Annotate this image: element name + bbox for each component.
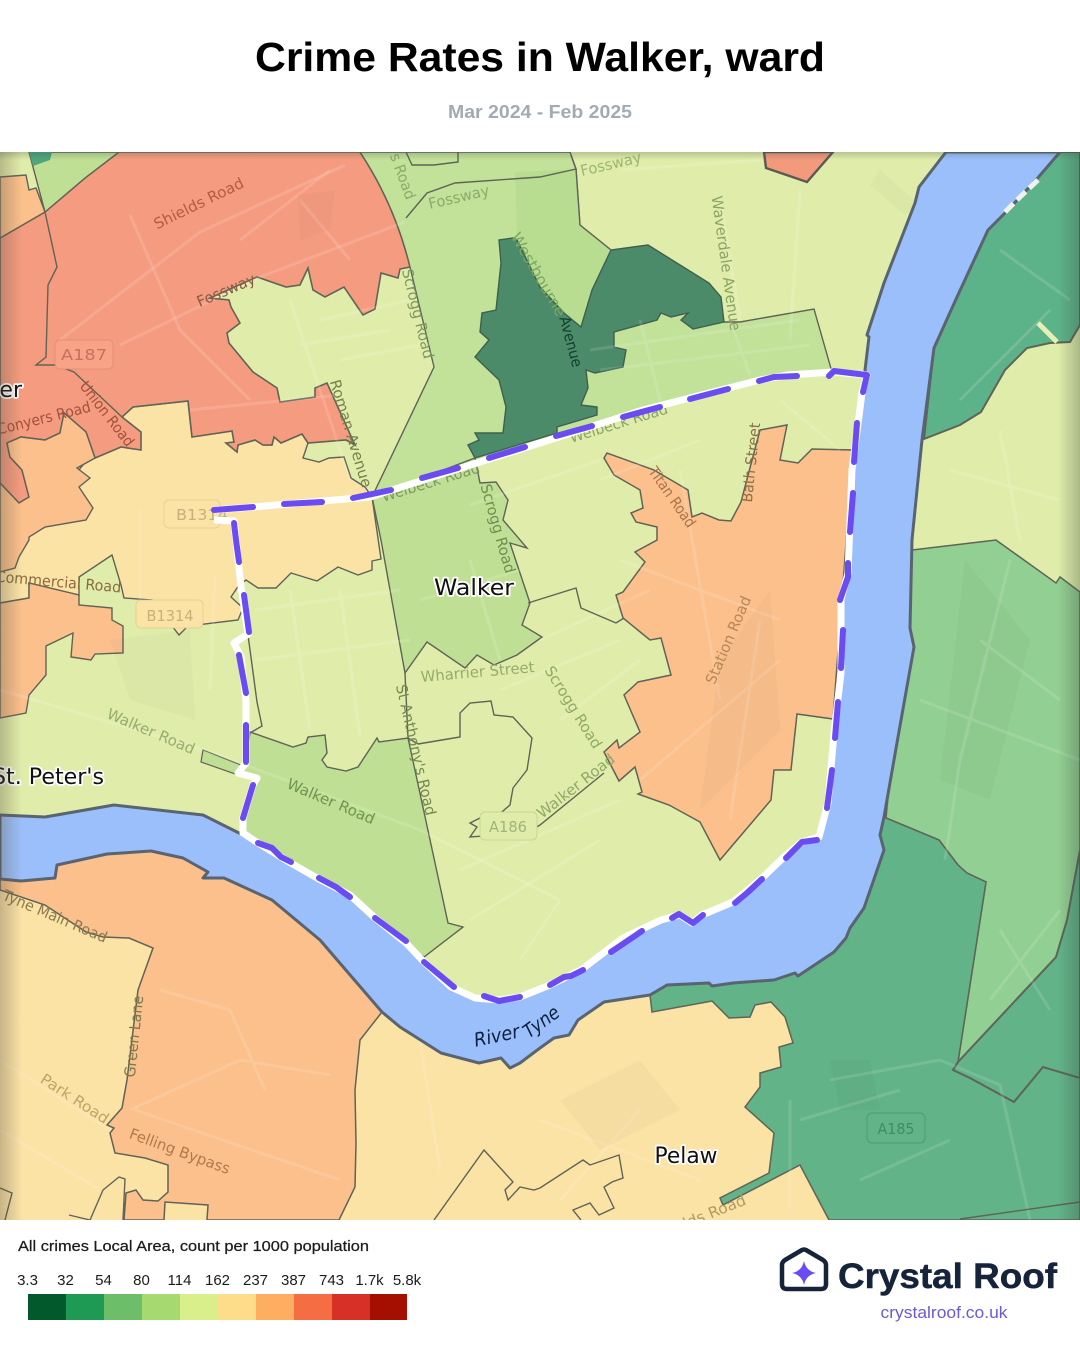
road label: Westbourne: Westbourne [507,229,570,320]
region: green top-left [29,152,119,212]
region: orange far north-west [0,175,45,238]
legend scale values: 54 [95,1272,112,1289]
road label: partial Road: s Road [386,151,419,202]
road badge: B1314 north [164,500,228,528]
water label: River: River [472,1020,523,1052]
legend scale values: 743 [319,1272,344,1289]
legend scale values: 3.3 [17,1272,38,1289]
ward boundary: purple dashes [214,371,867,1001]
road label: Scrogg Road central: Scrogg Road [476,482,519,575]
road label: Fossway north-east: Fossway [579,148,643,180]
legend scale values: 114 [168,1272,191,1289]
road badge: B1314 south: B1314 [146,607,194,625]
road label: Walker Road south: Walker Road [284,775,378,828]
water label: Tyne: Tyne [519,1001,564,1043]
legend scale values: 237 [243,1272,268,1289]
faint land-use patches [110,170,1030,1150]
road label: Tyne Main Road: Tyne Main Road [0,886,110,947]
region: salmon high-crime north-west [0,152,410,503]
street labels [0,148,764,1245]
road badge: A185: A185 [878,1120,914,1138]
region: mid green north-east [924,152,1080,439]
legend scale values: 5.8k [393,1272,422,1289]
legend colour bar [28,1294,407,1320]
road label: Scrogg Road south: Scrogg Road [541,663,606,752]
road label: Station Road: Station Road [702,593,755,687]
road label: Shields Road south: Shields Road [649,1191,748,1245]
logo wordmark: Crystal Roof [838,1257,1057,1296]
region: dark green corner patch [29,152,52,166]
road label: Wharrier Street: Wharrier Street [420,658,535,686]
road label: Walker Road east: Walker Road [533,750,618,822]
road label: Waverdale Avenue: Waverdale Avenue [708,195,744,332]
region: medium green north Walker [360,152,832,497]
region: cream north-west [0,401,381,635]
title: Crime Rates in Walker, ward [255,34,825,80]
road badge: A186: A186 [489,818,527,836]
road label: Titan Road: Titan Road [644,463,700,531]
icon: house with star [782,1250,826,1289]
legend scale values [17,1272,422,1289]
place label: Byker fragment: er [0,378,23,403]
region: slightly deeper green north [515,169,611,327]
region: orange Station Road, high crime [604,425,853,860]
legend scale values: 162 [205,1272,230,1289]
region: light green east [886,540,1080,1062]
road label: Welbeck Road east: Welbeck Road [567,400,670,447]
road label: Fossway north: Fossway [427,181,491,213]
road label: Walker Road west: Walker Road [104,705,198,758]
place label: Pelaw: Pelaw [654,1144,718,1169]
road label: Park Road: Park Road [37,1070,112,1128]
logo: Crystal Roof [782,1250,1057,1322]
road badge: B1314 south [136,600,203,628]
legend scale values: 1.7k [355,1272,384,1289]
road label: Roman Avenue: Roman Avenue [326,377,376,490]
region: cream south of the river [0,891,828,1220]
thin boundary lines [0,152,1080,1220]
ward boundary: white base line [214,372,867,1000]
road label: Shields Road: Shields Road [151,174,247,233]
region: mid green far east [953,850,1080,1102]
road label: Fossway west: Fossway [194,270,258,311]
place label: Walker: Walker [434,576,515,601]
legend [17,1239,422,1320]
road label: Avenue: Avenue [555,314,586,369]
road label: Union Road: Union Road [76,378,138,450]
region: small green strip [201,750,241,775]
region: salmon top island [764,152,833,182]
region: medium green central Walker [372,458,542,673]
road badge: A187: A187 [61,346,107,364]
region: mid green south-east [650,817,1080,1220]
road label: Green Lane: Green Lane [121,995,147,1078]
region: orange west lower [0,583,123,718]
map edge vignette [0,152,1080,1220]
road label: Welbeck Road west: Welbeck Road [379,459,482,506]
region: medium green south Walker [238,732,463,957]
road label: Scrogg Road north: Scrogg Road [398,267,438,361]
subtitle: date range: Mar 2024 - Feb 2025 [448,102,632,122]
road badge: A186 [480,812,537,840]
road badge: A187 [55,340,113,369]
river Tyne [0,152,1060,1068]
road label: Bath Street: Bath Street [738,422,764,503]
road badge: B1314 north: B1314 [176,506,228,524]
region: darkest green Westbourne patch [468,238,724,458]
region: orange west [0,413,95,572]
legend title: All crimes Local Area, count per 1000 population [18,1239,369,1255]
road label: Felling Bypass: Felling Bypass [127,1125,233,1178]
map base: neighbourhoods in light green [0,152,1080,996]
road label: St Anthony's Road: St Anthony's Road [392,683,440,817]
region: orange Felling [0,851,382,1220]
legend scale values: 387 [281,1272,306,1289]
road badge: A185 [867,1113,925,1143]
legend scale values: 32 [57,1272,74,1289]
river bank highlights [1005,178,1057,342]
website url: crystalroof.co.uk [880,1304,1008,1322]
road network [0,160,1080,1220]
legend scale values: 80 [133,1272,150,1289]
